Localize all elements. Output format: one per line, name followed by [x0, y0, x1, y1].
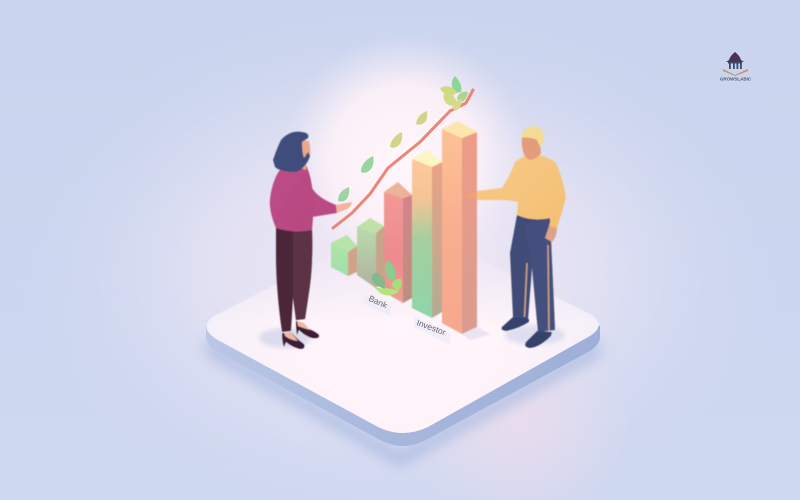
bar 5 base shadow: [462, 327, 490, 340]
platform shadow: [203, 336, 602, 468]
leaves along the line: [338, 76, 468, 295]
bar 3: [384, 182, 412, 303]
platform top: [206, 276, 598, 433]
man jumper: [477, 154, 566, 228]
growth line: [333, 90, 473, 228]
bar 1: [331, 235, 357, 276]
logo book: [723, 69, 748, 76]
leaf 1: [338, 187, 349, 202]
man shadow: [505, 325, 565, 345]
leaf 2: [361, 156, 374, 173]
woman jumper: [270, 161, 314, 232]
bar 2: [357, 218, 384, 288]
bar 4: [412, 150, 442, 318]
woman hair: [273, 132, 310, 172]
man trousers: [510, 215, 555, 332]
platform: [202, 276, 604, 469]
bar 5: [442, 121, 477, 334]
man hand (pointing): [462, 191, 477, 199]
logo columns: [728, 62, 742, 69]
man hand (right): [545, 226, 557, 242]
platform side: [206, 326, 600, 446]
leaf 3: [390, 132, 402, 148]
man: [462, 126, 566, 348]
man trouser stripes: [524, 245, 549, 331]
top leaf cluster: [440, 76, 468, 111]
label: Investor: [414, 316, 451, 345]
man neck and face: [522, 137, 541, 160]
man shoes: [502, 317, 552, 348]
woman neck and face: [296, 140, 310, 170]
logo: [720, 52, 752, 82]
logo wordmark: GROWSLABIC: [720, 76, 752, 82]
woman trousers: [276, 227, 312, 332]
woman shoes: [282, 321, 319, 349]
base leaf cluster: [372, 260, 402, 295]
woman arm and hand: [312, 188, 337, 217]
woman: [259, 132, 352, 349]
leaf 4: [416, 111, 427, 125]
woman shadow: [259, 328, 311, 348]
label: Bank: Bank: [367, 293, 390, 311]
logo dome: [726, 52, 744, 62]
label: Bank: [363, 293, 391, 316]
label: Investor: Investor: [415, 317, 447, 337]
man hair: [521, 126, 544, 147]
bar chart: [331, 121, 490, 340]
